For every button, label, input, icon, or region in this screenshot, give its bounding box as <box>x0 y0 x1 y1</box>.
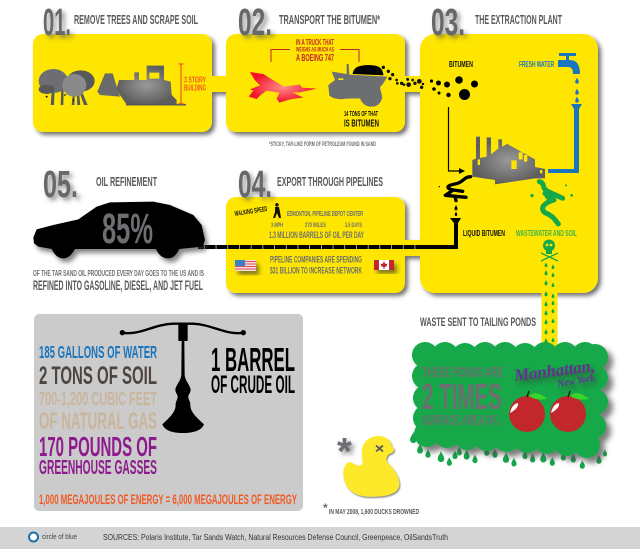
arrow: bitumen to plant <box>448 107 460 171</box>
step 5 heading <box>43 164 157 206</box>
panel: step 1 background <box>33 34 212 132</box>
car caption <box>33 268 204 293</box>
green drops <box>544 262 554 343</box>
Manhattan lettering: New York <box>556 373 596 390</box>
Manhattan lettering: Manhattan, <box>512 356 596 385</box>
callout: truck weight <box>271 38 359 64</box>
caption: 14 tons <box>344 111 379 130</box>
soil: 2 TONS OF SOIL <box>39 362 157 390</box>
measure line <box>178 64 184 104</box>
icon: rubber duck <box>337 431 399 497</box>
icon: red plane <box>249 72 317 103</box>
car with percentage <box>33 202 205 258</box>
water drops <box>575 78 579 103</box>
label: waste sent to tailing ponds: WASTE SENT TO TAILING PONDS <box>420 315 536 329</box>
bitumen chunks <box>422 76 478 100</box>
icon: wastewater splash <box>530 182 573 224</box>
icon: dump truck with bitumen <box>328 64 423 107</box>
label: 3 story building: 3 STORY <box>184 76 206 84</box>
icon: trees <box>39 69 95 105</box>
icon: circle of blue logo <box>29 532 38 542</box>
gray background <box>34 314 303 511</box>
pond comparison text: THESE PONDS ARE <box>422 364 503 381</box>
distance stat: 270 MILES <box>305 222 326 229</box>
tailing pond <box>410 342 608 469</box>
step 3 heading <box>431 2 562 44</box>
label: fresh water: FRESH WATER <box>519 59 554 69</box>
pipeline <box>198 245 424 249</box>
connector: step 1 to 2 <box>210 76 228 92</box>
number 02: 02. <box>238 2 272 44</box>
yellow process panels <box>33 34 598 293</box>
footnote: bitumen definition: *STICKY, TAR-LIKE FORM OF PETROLEUM FOUND IN SAND <box>269 141 376 148</box>
title: EXPORT THROUGH PIPELINES <box>277 175 383 189</box>
panel: barrel comparison: OF NATURAL GAS <box>39 408 157 435</box>
sources: SOURCES: Polaris Institute, Tar Sands Watch, Natural Resources Defense Council, Greenpeace, OilSandsTruth <box>103 533 448 542</box>
panel: barrel comparison <box>34 314 303 511</box>
step 4 panel content <box>234 203 394 276</box>
footnote: ducks drowned <box>323 501 419 516</box>
panel: barrel comparison: GREENHOUSE GASSES <box>39 457 157 479</box>
icon: apples <box>509 391 589 432</box>
step 4 heading <box>238 164 383 206</box>
stat: 85%: 85% <box>102 205 153 253</box>
icon: bulldozer <box>97 66 177 105</box>
connector: step 2 to 3 <box>403 76 422 92</box>
footer <box>0 527 640 549</box>
logo text: circle of blue <box>42 534 77 541</box>
barrels per day: 1.3 MILLION BARRELS OF OIL PER DAY <box>269 230 364 241</box>
title: REMOVE TREES AND SCRAPE SOIL <box>74 13 198 27</box>
panel: step 2 background <box>226 34 405 132</box>
water pipe <box>548 104 582 173</box>
pipeline depot text: EDMONTON, PIPELINE DEPOT CENTER <box>287 209 363 218</box>
title: OIL REFINEMENT <box>96 175 157 189</box>
icon: black car <box>33 202 205 258</box>
car caption: REFINED INTO GASOLINE, DIESEL, AND JET FUEL <box>33 278 203 293</box>
step 1 heading <box>43 2 198 44</box>
waste stream to tailing ponds <box>542 262 558 346</box>
yellow channel <box>542 290 558 346</box>
icon: skull and crossbones <box>541 240 558 261</box>
number 05: 05. <box>43 164 78 206</box>
tailing pond: 2 TIMES <box>422 376 502 417</box>
footnote: ducks drowned: * <box>323 501 328 515</box>
icon: Canadian flag <box>374 260 394 270</box>
caption: 14 tons: IS BITUMEN <box>344 118 379 130</box>
label: walking speed: WALKING SPEED <box>234 206 268 218</box>
title: THE EXTRACTION PLANT <box>475 13 562 27</box>
icon: faucet <box>558 53 580 74</box>
building height marker: BUILDING <box>184 84 206 92</box>
connector: step 4 to 3 <box>403 240 422 256</box>
icon: walker <box>273 203 281 218</box>
one barrel: 1 BARREL <box>211 341 295 378</box>
title: TRANSPORT THE BITUMEN* <box>279 13 380 27</box>
water: 185 GALLONS OF WATER <box>39 342 157 362</box>
building height marker <box>178 64 206 104</box>
footnote: ducks drowned: IN MAY 2008, 1,600 DUCKS DROWNED <box>329 507 419 516</box>
icon: balance scale <box>120 324 246 433</box>
callout: truck weight: IN A TRUCK THAT <box>296 38 334 47</box>
bumpy pond shape <box>412 342 608 458</box>
callout: truck weight: A BOEING 747 <box>296 53 334 64</box>
liquid bitumen pipe <box>420 218 461 249</box>
step 4 panel content: $31 BILLION TO INCREASE NETWORK <box>270 266 362 276</box>
spending text: PIPELINE COMPANIES ARE SPENDING <box>270 254 362 266</box>
greenhouse gases: 170 POUNDS OF <box>39 431 157 462</box>
icon: liquid bitumen splash <box>439 177 471 201</box>
energy: 1,000 MEGAJOULES OF ENERGY = 6,000 MEGAJOULES OF ENERGY <box>39 491 297 507</box>
bitumen load <box>353 65 383 75</box>
panel: step 4 background <box>226 197 405 293</box>
crossed-out eye <box>376 446 383 452</box>
green drips <box>410 432 607 469</box>
caption: 14 tons: 14 TONS OF THAT <box>344 111 378 118</box>
extraction plant diagram <box>420 53 582 261</box>
icon: factory <box>472 137 545 184</box>
callout: truck weight: WEIGHS AS MUCH AS <box>296 48 334 54</box>
bitumen chunks <box>382 66 423 89</box>
panel: barrel comparison: OF CRUDE OIL <box>211 371 295 399</box>
label: bitumen: BITUMEN <box>449 59 473 69</box>
car caption: OF THE TAR SAND OIL PRODUCED EVERY DAY GOES TO THE US AND IS <box>33 268 204 278</box>
panel: step 3 background <box>420 34 598 293</box>
truck body <box>328 64 387 107</box>
asterisk: * <box>337 431 352 473</box>
number 03: 03. <box>431 2 465 44</box>
number 04: 04. <box>238 164 272 206</box>
label: wastewater and soil: WASTEWATER AND SOIL <box>516 228 577 238</box>
label: liquid bitumen: LIQUID BITUMEN <box>463 228 505 238</box>
natural gas: 700-1,200 CUBIC FEET <box>39 389 157 409</box>
footer bar <box>0 527 640 549</box>
tailing pond: SURFACE AREA OF... <box>422 412 503 429</box>
number 01: 01. <box>43 2 71 44</box>
duration stat: 3.5 DAYS <box>345 222 362 229</box>
step 2 heading <box>238 2 380 44</box>
speed stat: 3 MPH <box>271 222 283 229</box>
icon: ground line <box>126 104 186 106</box>
bitumen drops <box>454 205 458 216</box>
icon: US flag <box>235 260 256 271</box>
duck body <box>343 436 399 497</box>
